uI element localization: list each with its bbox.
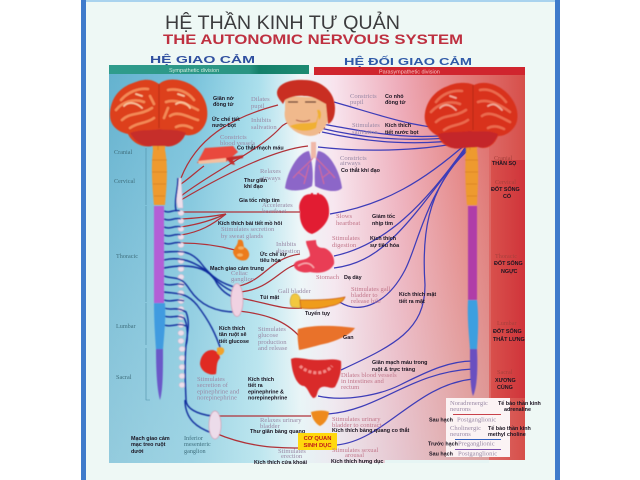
labels: airways: khí đạo bbox=[244, 184, 264, 190]
labels: rectum bbox=[341, 360, 427, 391]
labels: parasympathetic salivation: tiết nước bọt bbox=[385, 129, 419, 136]
panel: diagram background bbox=[109, 65, 525, 463]
labels: digestion: Inhibits bbox=[276, 241, 297, 248]
labels: parasympathetic pupil: pupil bbox=[350, 99, 364, 106]
labels: epinephrine: epinephrine & bbox=[248, 390, 284, 396]
labels: sweat glands: by sweat glands bbox=[221, 233, 264, 240]
labels: glucose: and release bbox=[258, 345, 288, 352]
labels: epinephrine: tiết ra bbox=[248, 382, 264, 389]
labels: glucose bbox=[219, 326, 288, 352]
left spinal regions: Cervical bbox=[114, 178, 135, 185]
right brain bbox=[425, 83, 518, 149]
labels: epinephrine: Kích thích bbox=[248, 377, 274, 383]
icon: blood vessel tissue bbox=[197, 146, 243, 165]
legend: noradrenergic: Postganglionic bbox=[457, 416, 496, 424]
labels: rectum: rectum bbox=[341, 384, 360, 391]
labels: heart: Accelerates bbox=[262, 202, 293, 209]
labels: bile: Stimulates gall bbox=[351, 286, 391, 293]
labels: glucose: tân ruột sẽ bbox=[219, 332, 247, 338]
labels: parasympathetic pupil: Constricts bbox=[350, 93, 377, 100]
callout: reproductive organ: SINH DỤC bbox=[303, 443, 332, 449]
labels: erection: Kích thích cửa khoái bbox=[254, 460, 308, 466]
legend: noradrenergic: Noradrenergic bbox=[450, 400, 488, 407]
labels: sexual arousal: Stimulates sexual bbox=[332, 447, 379, 454]
labels: sweat glands: Kích thích bài tiết mồ hôi bbox=[218, 220, 283, 227]
labels: slows heartbeat: nhịp tim bbox=[372, 221, 393, 227]
left brain bbox=[110, 80, 207, 146]
labels: slows heartbeat: Giảm tốc bbox=[372, 213, 395, 220]
labels: epinephrine: Stimulates bbox=[197, 376, 225, 383]
legend: cholinergic: Cholinergic bbox=[450, 425, 481, 432]
labels: stomach and gall bladder: Stomach bbox=[316, 274, 340, 281]
labels: glucose: Stimulates bbox=[258, 326, 286, 333]
labels: epinephrine: norepinephrine bbox=[197, 394, 237, 402]
labels: sweat glands: Stimulates secretion bbox=[221, 226, 275, 233]
legend: noradrenergic: neurons bbox=[450, 406, 471, 413]
labels: bile: tiết ra mật bbox=[399, 298, 425, 305]
right spinal regions: THẮT LƯNG bbox=[493, 335, 525, 343]
labels: inferior mesenteric ganglion bbox=[131, 435, 211, 455]
labels: parasympathetic salivation: salivation bbox=[352, 129, 378, 136]
labels: rectum: ruột & trực tràng bbox=[372, 367, 415, 373]
labels: head bbox=[212, 96, 277, 131]
labels: digestion bbox=[260, 241, 301, 264]
labels: stomach and gall bladder: Tuyến tụy bbox=[305, 310, 330, 317]
labels: sexual arousal: Kích thích hưng dục bbox=[331, 459, 383, 465]
labels: head: nước bọt bbox=[212, 123, 236, 129]
labels: bladder contract: bladder to contract bbox=[332, 422, 382, 429]
labels: stomach and gall bladder: Túi mật bbox=[260, 295, 279, 301]
callout: reproductive organ: CƠ QUAN bbox=[304, 436, 331, 442]
labels: slows heartbeat: heartbeat bbox=[336, 220, 360, 227]
labels: epinephrine bbox=[197, 376, 287, 402]
labels: glucose: production bbox=[258, 339, 287, 346]
labels: airways: airways bbox=[260, 175, 281, 182]
legend: noradrenergic: adrenaline bbox=[504, 407, 531, 413]
icon: gall bladder bbox=[290, 294, 300, 308]
labels: epinephrine: epinephrine and bbox=[197, 388, 240, 396]
labels: inferior mesenteric ganglion: ganglion bbox=[184, 448, 206, 455]
labels: erection: Stimulates bbox=[278, 448, 306, 455]
nerves: sympathetic red bbox=[181, 105, 325, 448]
labels: sweat glands bbox=[218, 220, 283, 240]
nerves: preganglionic dark blue bbox=[164, 178, 238, 433]
labels: constricts airways: airways bbox=[340, 160, 361, 167]
right spinal regions: ĐỐT SỐNG bbox=[491, 186, 520, 193]
labels: head: Giãn nở bbox=[213, 96, 234, 102]
labels: bladder relax bbox=[250, 417, 305, 435]
labels: bladder contract bbox=[332, 416, 409, 434]
labels: parasympathetic salivation: Stimulates bbox=[352, 122, 380, 129]
icon: urinary bladder bbox=[311, 410, 329, 426]
right spinal regions: CÙNG bbox=[497, 384, 513, 391]
labels: parasympathetic pupil bbox=[350, 93, 405, 106]
legend: cholinergic: Preganglionic bbox=[458, 440, 495, 448]
right spinal regions: ĐỐT SỐNG bbox=[494, 260, 523, 267]
left spinal regions: Thoracic bbox=[116, 253, 138, 260]
labels: stimulates digestion: Kích thích bbox=[370, 236, 396, 242]
labels: bile: release bile bbox=[351, 298, 381, 305]
legend: cholinergic bbox=[428, 425, 531, 458]
right spinal regions: Lumbar bbox=[497, 320, 517, 327]
labels: digestion: Ức chế sự bbox=[260, 251, 287, 258]
icon: lungs bbox=[285, 142, 342, 191]
left spinal regions: Sacral bbox=[116, 374, 132, 381]
right spinal regions bbox=[491, 155, 525, 391]
icon: head and face bbox=[277, 80, 335, 136]
labels: heart: heartbeat bbox=[262, 208, 286, 215]
callout: reproductive organ bbox=[298, 433, 337, 450]
labels: head: Ức chế tiết bbox=[212, 116, 240, 123]
left spinal regions: Lumbar bbox=[116, 323, 136, 330]
labels: bladder contract: Stimulates urinary bbox=[332, 416, 381, 423]
labels: parasympathetic pupil: đồng tử bbox=[385, 100, 405, 106]
labels: sexual arousal: arousal bbox=[345, 452, 364, 459]
labels: parasympathetic pupil: Co nhỏ bbox=[385, 94, 404, 100]
panel: diagram background: Sympathetic division bbox=[169, 68, 219, 74]
icon: liver bbox=[298, 326, 355, 350]
labels: digestion: digestion bbox=[276, 248, 301, 255]
labels: bladder relax: bladder bbox=[260, 423, 281, 430]
page frame with blue side bars bbox=[81, 0, 560, 480]
right spinal regions: Cervical bbox=[495, 179, 516, 186]
labels: bile: Kích thích mật bbox=[399, 292, 436, 298]
labels: constricts airways: Co thắt khí đạo bbox=[341, 167, 381, 174]
labels: airways: Thư giãn bbox=[244, 178, 267, 184]
labels: bile bbox=[351, 286, 436, 305]
inferior mesenteric ganglion bbox=[209, 411, 221, 439]
labels: stomach and gall bladder bbox=[260, 274, 362, 341]
legend: cholinergic: Sau hạch bbox=[429, 452, 453, 458]
labels: inferior mesenteric ganglion: dưới bbox=[131, 449, 144, 455]
right spinal regions: THẦN SỌ bbox=[492, 160, 516, 167]
legend: cholinergic: Trước hạch bbox=[428, 442, 458, 448]
labels: epinephrine: secretion of bbox=[197, 382, 229, 389]
legend: cholinergic: Tế bào thần kinh bbox=[488, 425, 531, 432]
labels: head: Dilates bbox=[251, 96, 270, 103]
labels: head: Inhibits bbox=[251, 117, 272, 124]
heading: sympathetic: HỆ GIAO CẢM bbox=[150, 53, 255, 66]
icon: small organ (orange) bbox=[233, 240, 249, 261]
left spinal regions: Cranial bbox=[114, 149, 132, 156]
right spinal regions: CỔ bbox=[503, 193, 511, 200]
labels: parasympathetic salivation: Kích thích bbox=[385, 123, 411, 129]
labels: head: salivation bbox=[251, 124, 277, 131]
icon: kidney and adrenal bbox=[200, 347, 224, 375]
labels: celiac ganglion: Mạch giao cảm trung bbox=[210, 266, 264, 272]
labels: bile: bladder to bbox=[351, 292, 378, 299]
labels: digestion: tiêu hóa bbox=[260, 258, 282, 264]
labels: rectum: in intestines and bbox=[341, 378, 385, 385]
icon: stomach bbox=[294, 240, 334, 273]
right spinal regions: Sacral bbox=[497, 369, 513, 376]
labels: constricts airways: Constricts bbox=[340, 155, 367, 162]
legend: noradrenergic bbox=[429, 400, 541, 424]
labels: parasympathetic salivation bbox=[352, 122, 419, 136]
legend bbox=[428, 398, 541, 458]
labels: head: đồng tử bbox=[213, 102, 233, 108]
right spinal regions: Cranial bbox=[494, 155, 512, 162]
labels: bladder relax: Relaxes urinary bbox=[260, 417, 302, 424]
celiac ganglion bbox=[231, 284, 243, 316]
right spinal regions: NGỰC bbox=[501, 269, 518, 275]
icon: heart bbox=[299, 193, 329, 234]
labels: inferior mesenteric ganglion: Mạch giao cảm bbox=[131, 436, 170, 442]
labels: glucose: glucose bbox=[258, 332, 278, 339]
labels: stimulates digestion: sự tiêu hóa bbox=[370, 243, 400, 249]
labels: inferior mesenteric ganglion: Inferior bbox=[184, 435, 203, 442]
labels: airways: Relaxes bbox=[260, 168, 281, 175]
labels: rectum: Dilates blood vessels bbox=[341, 372, 397, 379]
labels: blood vessels bbox=[220, 134, 284, 152]
labels: blood vessels: Co thắt mạch máu bbox=[237, 144, 284, 152]
labels: stomach and gall bladder: Dạ dày bbox=[344, 275, 362, 281]
left spinal regions bbox=[114, 148, 150, 400]
labels: head: pupil bbox=[251, 103, 265, 110]
labels: erection bbox=[254, 448, 308, 466]
labels: rectum: Giãn mạch máu trong bbox=[372, 360, 427, 366]
right spinal regions: XƯƠNG bbox=[495, 378, 516, 384]
labels: sexual arousal bbox=[331, 447, 383, 465]
nerves: parasympathetic blue bbox=[316, 102, 473, 445]
labels: slows heartbeat bbox=[336, 213, 395, 227]
left spinal cord bbox=[150, 126, 167, 400]
labels: blood vessels: blood vessels bbox=[220, 140, 256, 147]
heading: parasympathetic: HỆ ĐỐI GIAO CẢM bbox=[344, 54, 472, 68]
right spinal regions: Thoracic bbox=[495, 253, 517, 260]
title: THE AUTONOMIC NERVOUS SYSTEM bbox=[163, 32, 463, 47]
labels: glucose: Kích thích bbox=[219, 326, 245, 332]
panel: diagram background: Parasympathetic division bbox=[379, 70, 440, 76]
labels: heart: Gia tốc nhịp tim bbox=[239, 197, 280, 204]
labels: inferior mesenteric ganglion: mesenteric bbox=[184, 441, 211, 448]
labels: stimulates digestion bbox=[332, 235, 400, 249]
legend: cholinergic: neurons bbox=[450, 431, 471, 438]
labels: celiac ganglion: ganglion bbox=[231, 276, 255, 283]
legend: noradrenergic: Sau hạch bbox=[429, 418, 453, 424]
labels: bladder relax: Thư giãn bàng quang bbox=[250, 429, 305, 435]
sympathetic ganglion chain bbox=[176, 178, 185, 388]
labels: celiac ganglion: Celiac bbox=[231, 270, 248, 277]
labels: stomach and gall bladder: Gan bbox=[343, 335, 353, 341]
title bbox=[163, 12, 463, 47]
labels: stimulates digestion: Stimulates bbox=[332, 235, 360, 242]
labels: blood vessels: Constricts bbox=[220, 134, 247, 141]
labels: constricts airways bbox=[340, 155, 381, 174]
labels: erection: erection bbox=[281, 453, 303, 460]
labels: stomach and gall bladder: Gall bladder bbox=[278, 288, 312, 295]
legend: noradrenergic: Tế bào thần kinh bbox=[498, 400, 541, 407]
labels: glucose: tiết glucose bbox=[219, 338, 249, 345]
icon: pancreas bbox=[300, 297, 345, 309]
legend: cholinergic: methyl choline bbox=[488, 432, 526, 438]
title: HỆ THẦN KINH TỰ QUẢN bbox=[165, 12, 400, 34]
labels: heart bbox=[239, 197, 293, 215]
labels: celiac ganglion bbox=[210, 266, 264, 283]
labels: airways bbox=[244, 168, 281, 190]
legend: cholinergic: Postganglionic bbox=[458, 450, 497, 458]
labels: stimulates digestion: digestion bbox=[332, 242, 357, 249]
labels: inferior mesenteric ganglion: mạc treo ruột bbox=[131, 442, 166, 448]
right spinal regions: ĐỐT SỐNG bbox=[493, 328, 522, 335]
icon: large intestine bbox=[291, 358, 341, 398]
right spinal cord bbox=[463, 127, 478, 396]
labels: bladder contract: Kích thích bàng quang co thắt bbox=[332, 427, 409, 434]
labels: slows heartbeat: Slows bbox=[336, 213, 353, 220]
labels: epinephrine: norepinephrine bbox=[248, 396, 287, 402]
